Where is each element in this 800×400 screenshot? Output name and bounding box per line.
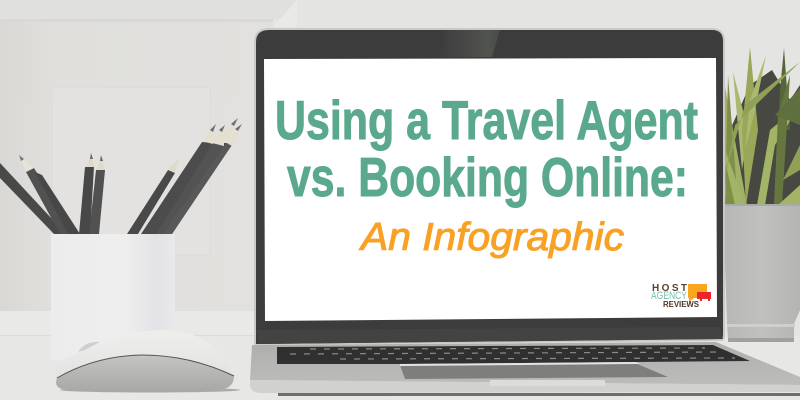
potted plant <box>715 47 800 342</box>
keyboard <box>277 345 750 364</box>
title <box>275 89 698 208</box>
laptop screen <box>264 58 717 321</box>
computer mouse <box>56 330 240 392</box>
pencils in cup <box>0 118 242 360</box>
cup <box>51 234 175 360</box>
logo: Host Agency Reviews: HOST <box>652 283 687 294</box>
logo: Host Agency Reviews: REVIEWS <box>663 300 700 309</box>
pencils: middle pair <box>79 153 105 234</box>
pencils: right group <box>127 118 242 234</box>
laptop base <box>250 342 800 396</box>
subtitle: An Infographic <box>359 216 625 259</box>
laptop lid <box>254 28 725 345</box>
logo icon: speech bubbles <box>688 284 711 302</box>
logo: Host Agency Reviews: AGENCY <box>651 290 688 302</box>
logo: Host Agency Reviews <box>651 283 711 309</box>
leaves <box>715 47 800 206</box>
title: vs. Booking Online: <box>287 146 688 208</box>
pot <box>723 205 800 340</box>
pencils: left group <box>0 155 80 234</box>
trackpad <box>400 363 668 379</box>
